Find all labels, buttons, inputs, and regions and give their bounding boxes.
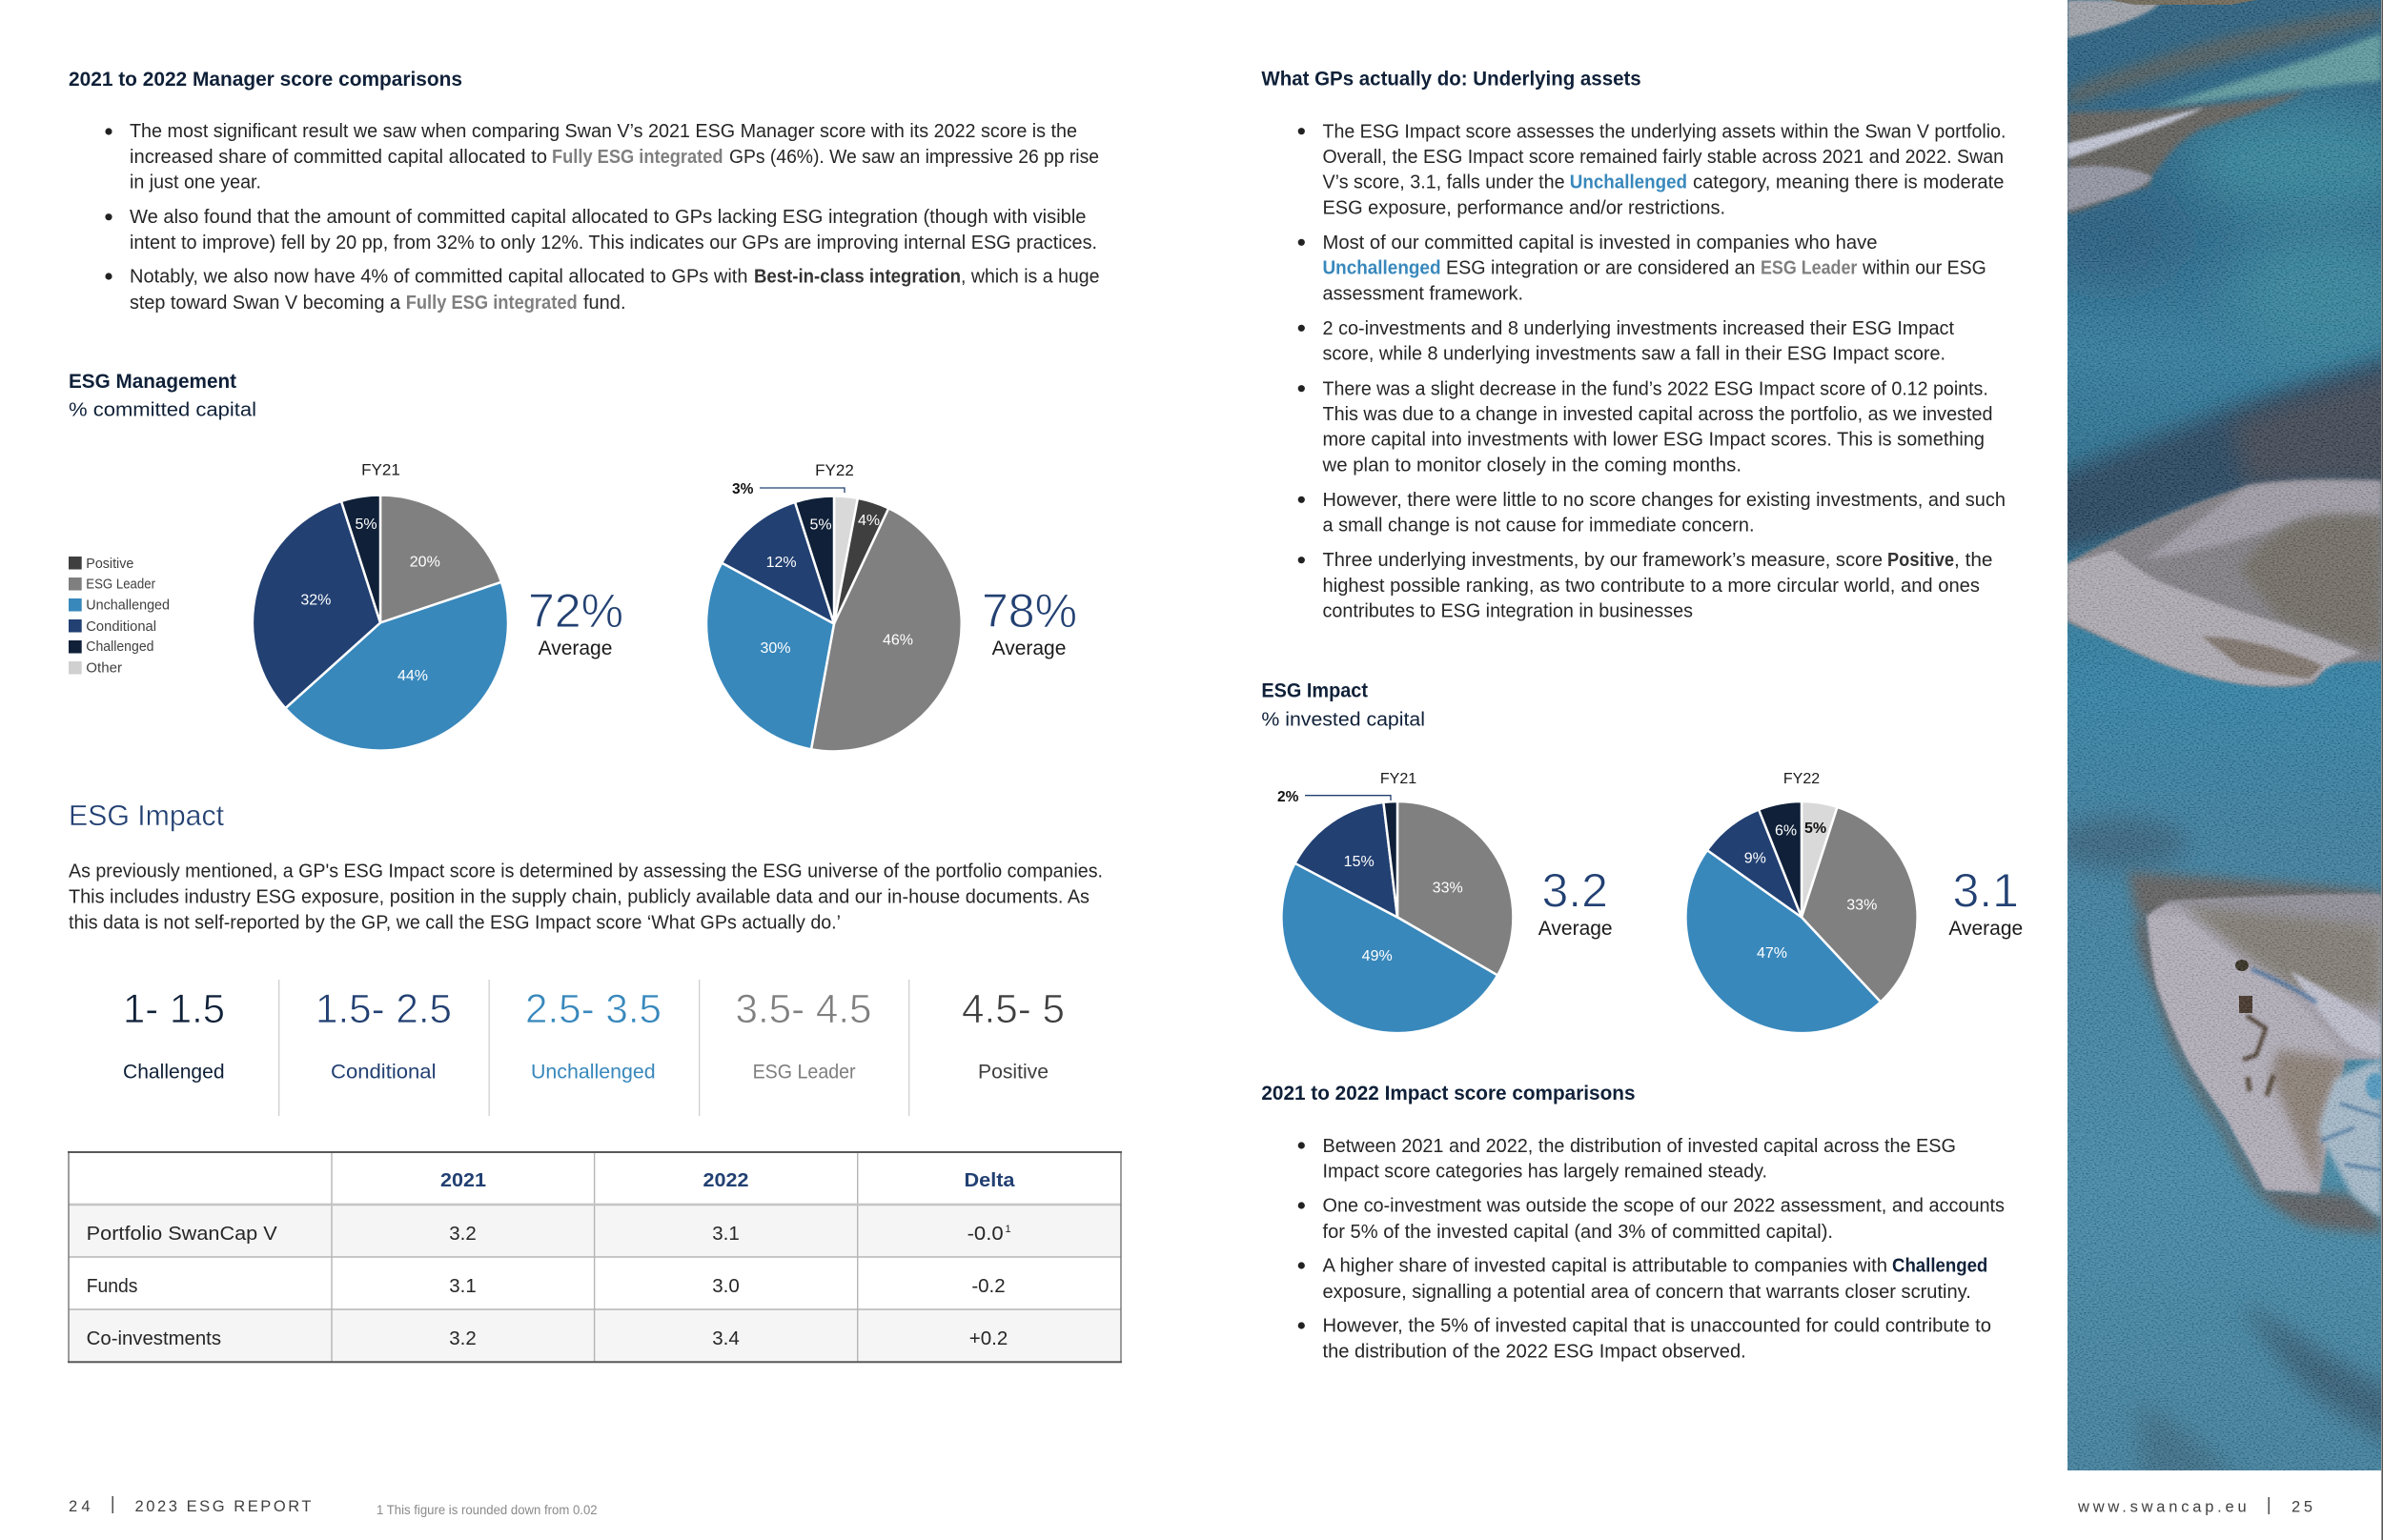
- score scale: Unchallenged: [531, 1062, 656, 1084]
- bullet list: manager findings: fund.: [583, 293, 625, 314]
- bullet list: impact score findings: However, the 5% of invested capital that is unaccounted for could contribute to: [1323, 1316, 1991, 1337]
- table: impact scores by year: -0.0: [967, 1223, 1004, 1245]
- left page: manager score comparisons text: [69, 69, 1100, 314]
- heading: ESG Impact invested capital: ESG Impact: [1261, 680, 1368, 702]
- bullet list: manager findings: in just one year.: [130, 172, 261, 193]
- bullet list: underlying assets findings: Three underlying investments, by our framework’s measure, score: [1323, 550, 1883, 571]
- right footer: website and page number: 25: [2291, 1498, 2312, 1515]
- bullet list: impact score findings: for 5% of the invested capital (and 3% of committed capital).: [1323, 1222, 1833, 1243]
- legend: Challenged: [86, 639, 154, 655]
- bullet list: impact score findings: [1298, 1136, 2005, 1362]
- average: 3.1: [1948, 864, 2023, 940]
- heading: ESG Impact: ESG Impact: [69, 799, 224, 832]
- heading: What GPs actually do: What GPs actually do: Underlying assets: [1261, 68, 1641, 90]
- panel: ESG Management charts: [69, 371, 1077, 751]
- bullet list: manager findings: Fully ESG integrated: [406, 293, 578, 314]
- legend: Conditional: [86, 619, 156, 635]
- pie chart: ESG Management FY21: [253, 495, 508, 751]
- pie labels: FY21 impact: 49%: [1362, 948, 1393, 964]
- pie labels: FY21 management: 44%: [397, 668, 428, 684]
- score scale: 1- 1.5: [123, 986, 225, 1032]
- bullet list: impact score findings: Between 2021 and 2022, the distribution of invested capital across the ESG: [1323, 1136, 1956, 1157]
- score scale: ESG Leader: [753, 1062, 856, 1084]
- average: 3.2: 3.2: [1541, 864, 1608, 918]
- score scale: 3.5- 4.5: [736, 986, 871, 1032]
- bullet list: manager findings: [105, 121, 1099, 314]
- bullet list: manager findings: We also found that the amount of committed capital allocated to GPs lacking ESG integration (though with visible: [130, 207, 1087, 228]
- table: impact scores by year: Delta: [965, 1169, 1015, 1191]
- bullet list: underlying assets findings: 2 co-investments and 8 underlying investments increased their ESG Impact: [1323, 318, 1954, 339]
- legend: ESG Leader: [86, 578, 155, 593]
- bullet list: manager findings: Fully ESG integrated: [552, 147, 723, 168]
- table: impact scores by year: 3.1: [449, 1275, 477, 1297]
- bullet list: manager findings: increased share of committed capital allocated to: [130, 147, 547, 168]
- bullet list: impact score findings: Challenged: [1892, 1255, 1987, 1276]
- bullet list: manager findings: The most significant result we saw when comparing Swan V’s 2021 ESG Manager score with its 2022 score is the: [130, 121, 1077, 142]
- table: impact scores by year: [68, 1152, 1122, 1362]
- bullet list: underlying assets findings: highest possible ranking, as two contribute to a more circular world, and ones: [1323, 576, 1980, 597]
- pie labels: FY21 impact: 15%: [1344, 854, 1375, 870]
- pie labels: FY22 management: 12%: [766, 555, 797, 571]
- bullet list: underlying assets findings: Positive: [1887, 550, 1954, 571]
- panel: impact score comparisons text: [1261, 1083, 2005, 1362]
- pie labels: FY21 impact: 33%: [1433, 881, 1463, 897]
- score scale: 2.5- 3.5: [525, 986, 662, 1032]
- pie labels: FY22 impact: 5%: [1804, 821, 1826, 837]
- average: 72%: 72%: [528, 584, 623, 638]
- bullet list: underlying assets findings: more capital into investments with lower ESG Impact scores. This is something: [1323, 430, 1985, 451]
- paragraph: ESG Impact definition: This includes industry ESG exposure, position in the supply chain, publicly available data and our in-house documents. As: [69, 887, 1090, 908]
- left footer: page number and report name: 24: [69, 1498, 90, 1515]
- score scale: Positive: [978, 1062, 1049, 1084]
- pie labels: FY22 impact: 6%: [1775, 823, 1797, 840]
- score scale: Conditional: [331, 1062, 437, 1084]
- pie labels: FY22 impact: 47%: [1757, 945, 1787, 962]
- table: impact scores by year: 2021: [440, 1169, 486, 1191]
- right footer: website and page number: [2077, 1497, 2312, 1515]
- bullet list: underlying assets findings: ESG Leader: [1761, 258, 1858, 279]
- bullet list: underlying assets findings: This was due to a change in invested capital across the portfolio, as we invested: [1323, 404, 1992, 425]
- photo: aerial view of a braided glacial river: [2067, 0, 2381, 1470]
- subheading: percent invested capital: % invested capital: [1261, 710, 1425, 731]
- legend: [69, 557, 170, 677]
- bullet list: underlying assets findings: contributes to ESG integration in businesses: [1323, 601, 1693, 622]
- panel: ESG Impact explanation: [69, 799, 1103, 1116]
- legend: Other: [86, 661, 122, 677]
- bullet list: underlying assets findings: score, while 8 underlying investments saw a fall in their ESG Impact score.: [1323, 344, 1945, 365]
- bullet list: underlying assets findings: Unchallenged: [1323, 258, 1441, 279]
- paragraph: ESG Impact definition: As previously mentioned, a GP's ESG Impact score is determined by assessing the ESG universe of the portfolio companies.: [69, 861, 1103, 882]
- table: impact scores by year: Funds: [87, 1276, 137, 1297]
- table: impact scores by year: Portfolio SwanCap V: [87, 1224, 277, 1245]
- bullet list: underlying assets findings: a small change is not cause for immediate concern.: [1323, 516, 1754, 537]
- bullet list: manager findings: Best-in-class integration: [754, 267, 961, 288]
- pie labels: FY21 impact: [1277, 771, 1463, 964]
- right page: underlying assets text: [1261, 68, 2006, 622]
- bullet list: manager findings: intent to improve) fell by 20 pp, from 32% to only 12%. This indicates our GPs are improving internal ESG practices.: [130, 233, 1097, 253]
- pie chart: ESG Impact FY22: [1685, 801, 1918, 1033]
- bullet list: impact score findings: exposure, signalling a potential area of concern that warrants closer scrutiny.: [1323, 1282, 1971, 1303]
- bullet list: underlying assets findings: ESG exposure, performance and/or restrictions.: [1323, 197, 1725, 218]
- bullet list: impact score findings: the distribution of the 2022 ESG Impact observed.: [1323, 1341, 1746, 1362]
- pie labels: FY21 impact: FY21: [1380, 771, 1416, 787]
- table: impact scores by year: 3.0: [712, 1275, 740, 1297]
- pie labels: FY22 impact: 33%: [1846, 897, 1877, 913]
- bullet list: underlying assets findings: However, there were little to no score changes for existing investments, and such: [1323, 490, 2006, 511]
- pie labels: FY22 impact: 9%: [1744, 851, 1766, 867]
- pie labels: FY22 impact: FY22: [1783, 771, 1820, 787]
- legend: Positive: [86, 557, 133, 572]
- table: impact scores by year: 1: [1005, 1224, 1011, 1235]
- bullet list: underlying assets findings: category, meaning there is moderate: [1693, 172, 2004, 193]
- bullet list: underlying assets findings: Unchallenged: [1570, 172, 1687, 193]
- bullet list: impact score findings: Impact score categories has largely remained steady.: [1323, 1162, 1767, 1183]
- pie labels: FY21 management: FY21: [361, 460, 400, 478]
- pie chart: ESG Impact FY21: [1281, 801, 1513, 1033]
- table: impact scores by year: -0.2: [971, 1275, 1006, 1297]
- score scale: [123, 980, 1065, 1116]
- pie labels: FY22 impact: [1744, 771, 1877, 962]
- table: impact scores by year: 2022: [703, 1169, 749, 1191]
- bullet list: manager findings: Notably, we also now have 4% of committed capital allocated to GPs with: [130, 267, 747, 288]
- table: impact scores by year: Co-investments: [87, 1328, 221, 1349]
- pie labels: FY22 management: 30%: [760, 640, 791, 657]
- pie labels: FY22 management: [732, 461, 913, 657]
- pie labels: FY21 management: 5%: [355, 517, 377, 533]
- bullet list: underlying assets findings: ESG integration or are considered an: [1446, 258, 1756, 279]
- bullet list: impact score findings: One co-investment was outside the scope of our 2022 assessment, and accounts: [1323, 1196, 2005, 1217]
- bullet list: underlying assets findings: Overall, the ESG Impact score remained fairly stable across 2021 and 2022. Swan: [1323, 147, 2004, 168]
- legend: Unchallenged: [86, 598, 170, 613]
- bullet list: manager findings: step toward Swan V becoming a: [130, 293, 401, 314]
- average: 3.2: Average: [1538, 918, 1613, 940]
- bullet list: underlying assets findings: within our ESG: [1862, 258, 1986, 279]
- bullet list: underlying assets findings: There was a slight decrease in the fund’s 2022 ESG Impact score of 0.12 points.: [1323, 378, 1988, 399]
- panel: ESG Impact charts: [1261, 680, 2023, 1033]
- table: impact scores by year: 3.2: [449, 1327, 477, 1349]
- pie labels: FY21 management: 20%: [410, 554, 440, 570]
- bullet list: underlying assets findings: V’s score, 3.1, falls under the: [1323, 172, 1565, 193]
- bullet list: underlying assets findings: The ESG Impact score assesses the underlying assets within the Swan V portfolio.: [1323, 121, 2006, 142]
- table: impact scores by year: +0.2: [969, 1327, 1008, 1349]
- left footer: page number and report name: [69, 1496, 311, 1515]
- heading: ESG Management: ESG Management: [69, 371, 236, 393]
- score scale: Challenged: [123, 1062, 225, 1084]
- table: impact scores by year: 3.1: [712, 1223, 740, 1245]
- table: impact scores by year: 3.2: [449, 1223, 477, 1245]
- average: 3.2: [1538, 864, 1613, 940]
- bullet list: manager findings: , which is a huge: [961, 267, 1100, 288]
- bullet list: underlying assets findings: assessment framework.: [1323, 283, 1523, 304]
- left footer: page number and report name: 2023 ESG REPORT: [135, 1498, 311, 1515]
- subheading: percent committed capital: % committed capital: [69, 400, 256, 421]
- bullet list: underlying assets findings: , the: [1954, 550, 1992, 571]
- pie labels: FY22 management: 3%: [732, 481, 754, 497]
- paragraph: ESG Impact definition: this data is not self-reported by the GP, we call the ESG Impact score ‘What GPs actually do.’: [69, 912, 841, 933]
- average: 72%: Average: [539, 638, 612, 659]
- pie chart: ESG Management FY22: [706, 496, 962, 751]
- pie labels: FY22 management: 5%: [809, 517, 832, 534]
- bullet list: underlying assets findings: we plan to monitor closely in the coming months.: [1321, 456, 1741, 476]
- heading: 2021 to 2022 Manager score comparisons: 2021 to 2022 Manager score comparisons: [69, 69, 462, 91]
- pie labels: FY22 management: 4%: [858, 513, 880, 529]
- pie labels: FY21 impact: 2%: [1277, 789, 1299, 805]
- pie labels: FY21 management: [300, 460, 440, 684]
- photo edge line: [2381, 0, 2383, 1540]
- average: 3.1: 3.1: [1952, 864, 2019, 918]
- paragraph: ESG Impact definition: [69, 861, 1103, 933]
- pie labels: FY22 management: FY22: [815, 461, 854, 479]
- right footer: website and page number: www.swancap.eu: [2077, 1498, 2247, 1515]
- average: 78%: Average: [992, 638, 1066, 659]
- heading: 2021 to 2022 Impact score comparisons: 2021 to 2022 Impact score comparisons: [1261, 1083, 1636, 1104]
- footnote: 1 This figure is rounded down from 0.02: [377, 1503, 598, 1517]
- average: 3.1: Average: [1948, 918, 2023, 940]
- bullet list: underlying assets findings: [1298, 121, 2006, 622]
- score scale: 4.5- 5: [962, 986, 1065, 1032]
- pie labels: FY21 management: 32%: [300, 593, 331, 609]
- bullet list: manager findings: GPs (46%). We saw an impressive 26 pp rise: [729, 147, 1099, 168]
- bullet list: underlying assets findings: Most of our committed capital is invested in companies who have: [1323, 233, 1878, 253]
- bullet list: impact score findings: A higher share of invested capital is attributable to companies with: [1323, 1255, 1887, 1276]
- average: 78%: 78%: [982, 584, 1077, 638]
- table: impact scores by year: 3.4: [712, 1327, 740, 1349]
- score scale: 1.5- 2.5: [316, 986, 452, 1032]
- pie labels: FY22 management: 46%: [883, 633, 913, 649]
